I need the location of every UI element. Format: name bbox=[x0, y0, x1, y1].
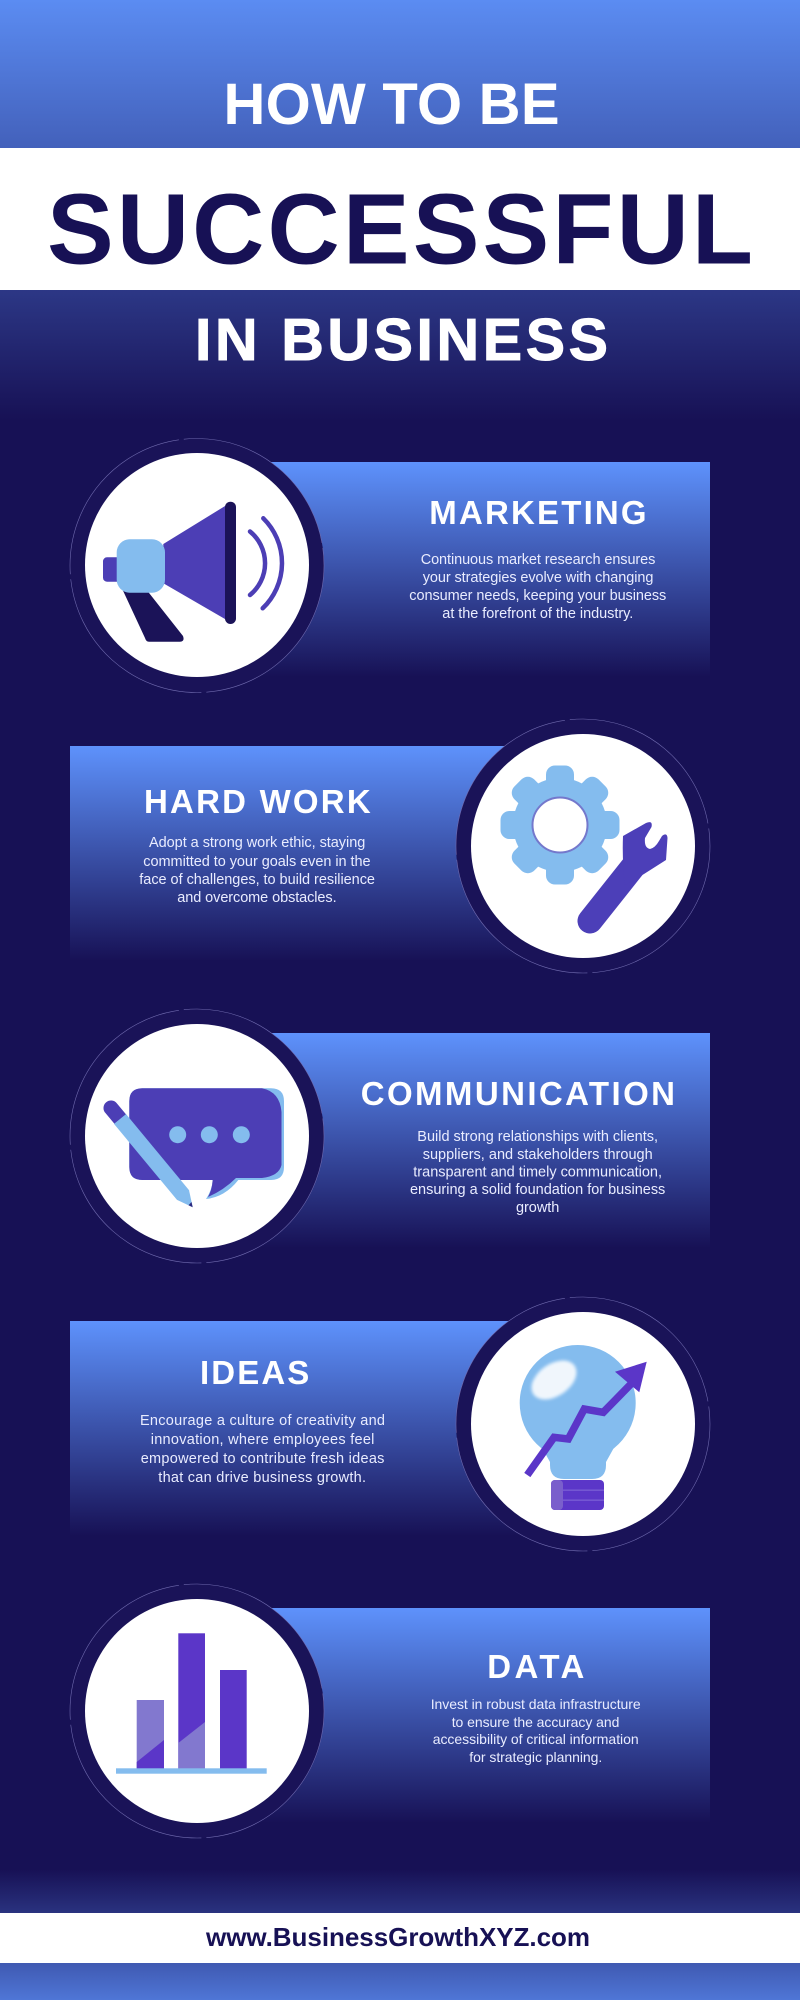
panel background: communication bbox=[197, 1033, 710, 1248]
text: ideas: that can drive business growth. bbox=[158, 1470, 366, 1486]
text: communication: Build strong relationships with clients, bbox=[417, 1129, 658, 1145]
text: communication: suppliers, and stakeholders through bbox=[423, 1147, 653, 1163]
text: hard work: Adopt a strong work ethic, staying bbox=[149, 835, 365, 851]
text: ideas: empowered to contribute fresh ideas bbox=[141, 1451, 384, 1467]
icon: light bulb with growth arrow bbox=[456, 1297, 710, 1551]
text: communication: ensuring a solid foundation for business bbox=[410, 1182, 665, 1198]
text: data: accessibility of critical information bbox=[433, 1731, 639, 1747]
white title band bbox=[0, 148, 800, 290]
heading: marketing: MARKETING bbox=[429, 494, 647, 531]
text: hard work: committed to your goals even in the bbox=[143, 854, 371, 870]
text: hard work: face of challenges, to build resilience bbox=[139, 872, 375, 888]
icon: bar chart bbox=[70, 1584, 324, 1838]
heading: data: DATA bbox=[487, 1648, 584, 1685]
website url: www.BusinessGrowthXYZ.com bbox=[205, 1922, 590, 1952]
text: marketing bbox=[409, 552, 666, 622]
text: marketing: consumer needs, keeping your business bbox=[409, 588, 666, 604]
title line: in business: IN BUSINESS bbox=[195, 307, 608, 373]
text: communication bbox=[410, 1129, 665, 1216]
text: ideas bbox=[140, 1413, 385, 1486]
text: hard work bbox=[139, 835, 375, 906]
icon: megaphone bbox=[70, 438, 324, 692]
footer band with website bbox=[0, 1913, 800, 1963]
text: data: for strategic planning. bbox=[469, 1749, 602, 1765]
heading: hard work: HARD WORK bbox=[144, 783, 371, 820]
text: data: Invest in robust data infrastructure bbox=[431, 1696, 641, 1712]
text: hard work: and overcome obstacles. bbox=[177, 890, 337, 906]
text: data bbox=[431, 1696, 641, 1765]
text: marketing: Continuous market research ensures bbox=[421, 552, 655, 568]
heading: communication: COMMUNICATION bbox=[361, 1075, 675, 1112]
text: marketing: at the forefront of the industry. bbox=[442, 606, 633, 622]
icon: gear and wrench bbox=[456, 719, 710, 973]
panel: communication bbox=[70, 1009, 710, 1263]
panel: data bbox=[70, 1584, 710, 1838]
text: ideas: Encourage a culture of creativity and bbox=[140, 1413, 385, 1429]
text: marketing: your strategies evolve with changing bbox=[423, 570, 653, 586]
text: communication: transparent and timely communication, bbox=[413, 1164, 662, 1180]
text: communication: growth bbox=[516, 1200, 559, 1216]
panel background: data bbox=[197, 1608, 710, 1823]
title line: successful: SUCCESSFUL bbox=[47, 174, 753, 286]
panel background: hard work bbox=[70, 746, 583, 961]
panel background: marketing bbox=[197, 462, 710, 677]
panel: marketing bbox=[70, 438, 710, 692]
title line: how to be: HOW TO BE bbox=[224, 72, 560, 137]
panel: ideas bbox=[70, 1297, 710, 1551]
title bbox=[0, 72, 800, 373]
text: ideas: innovation, where employees feel bbox=[151, 1432, 374, 1448]
panel: hard work bbox=[70, 719, 710, 973]
heading: ideas: IDEAS bbox=[200, 1354, 309, 1391]
icon: speech bubble and pencil bbox=[70, 1009, 324, 1263]
panel background: ideas bbox=[70, 1321, 583, 1536]
text: data: to ensure the accuracy and bbox=[452, 1714, 619, 1730]
